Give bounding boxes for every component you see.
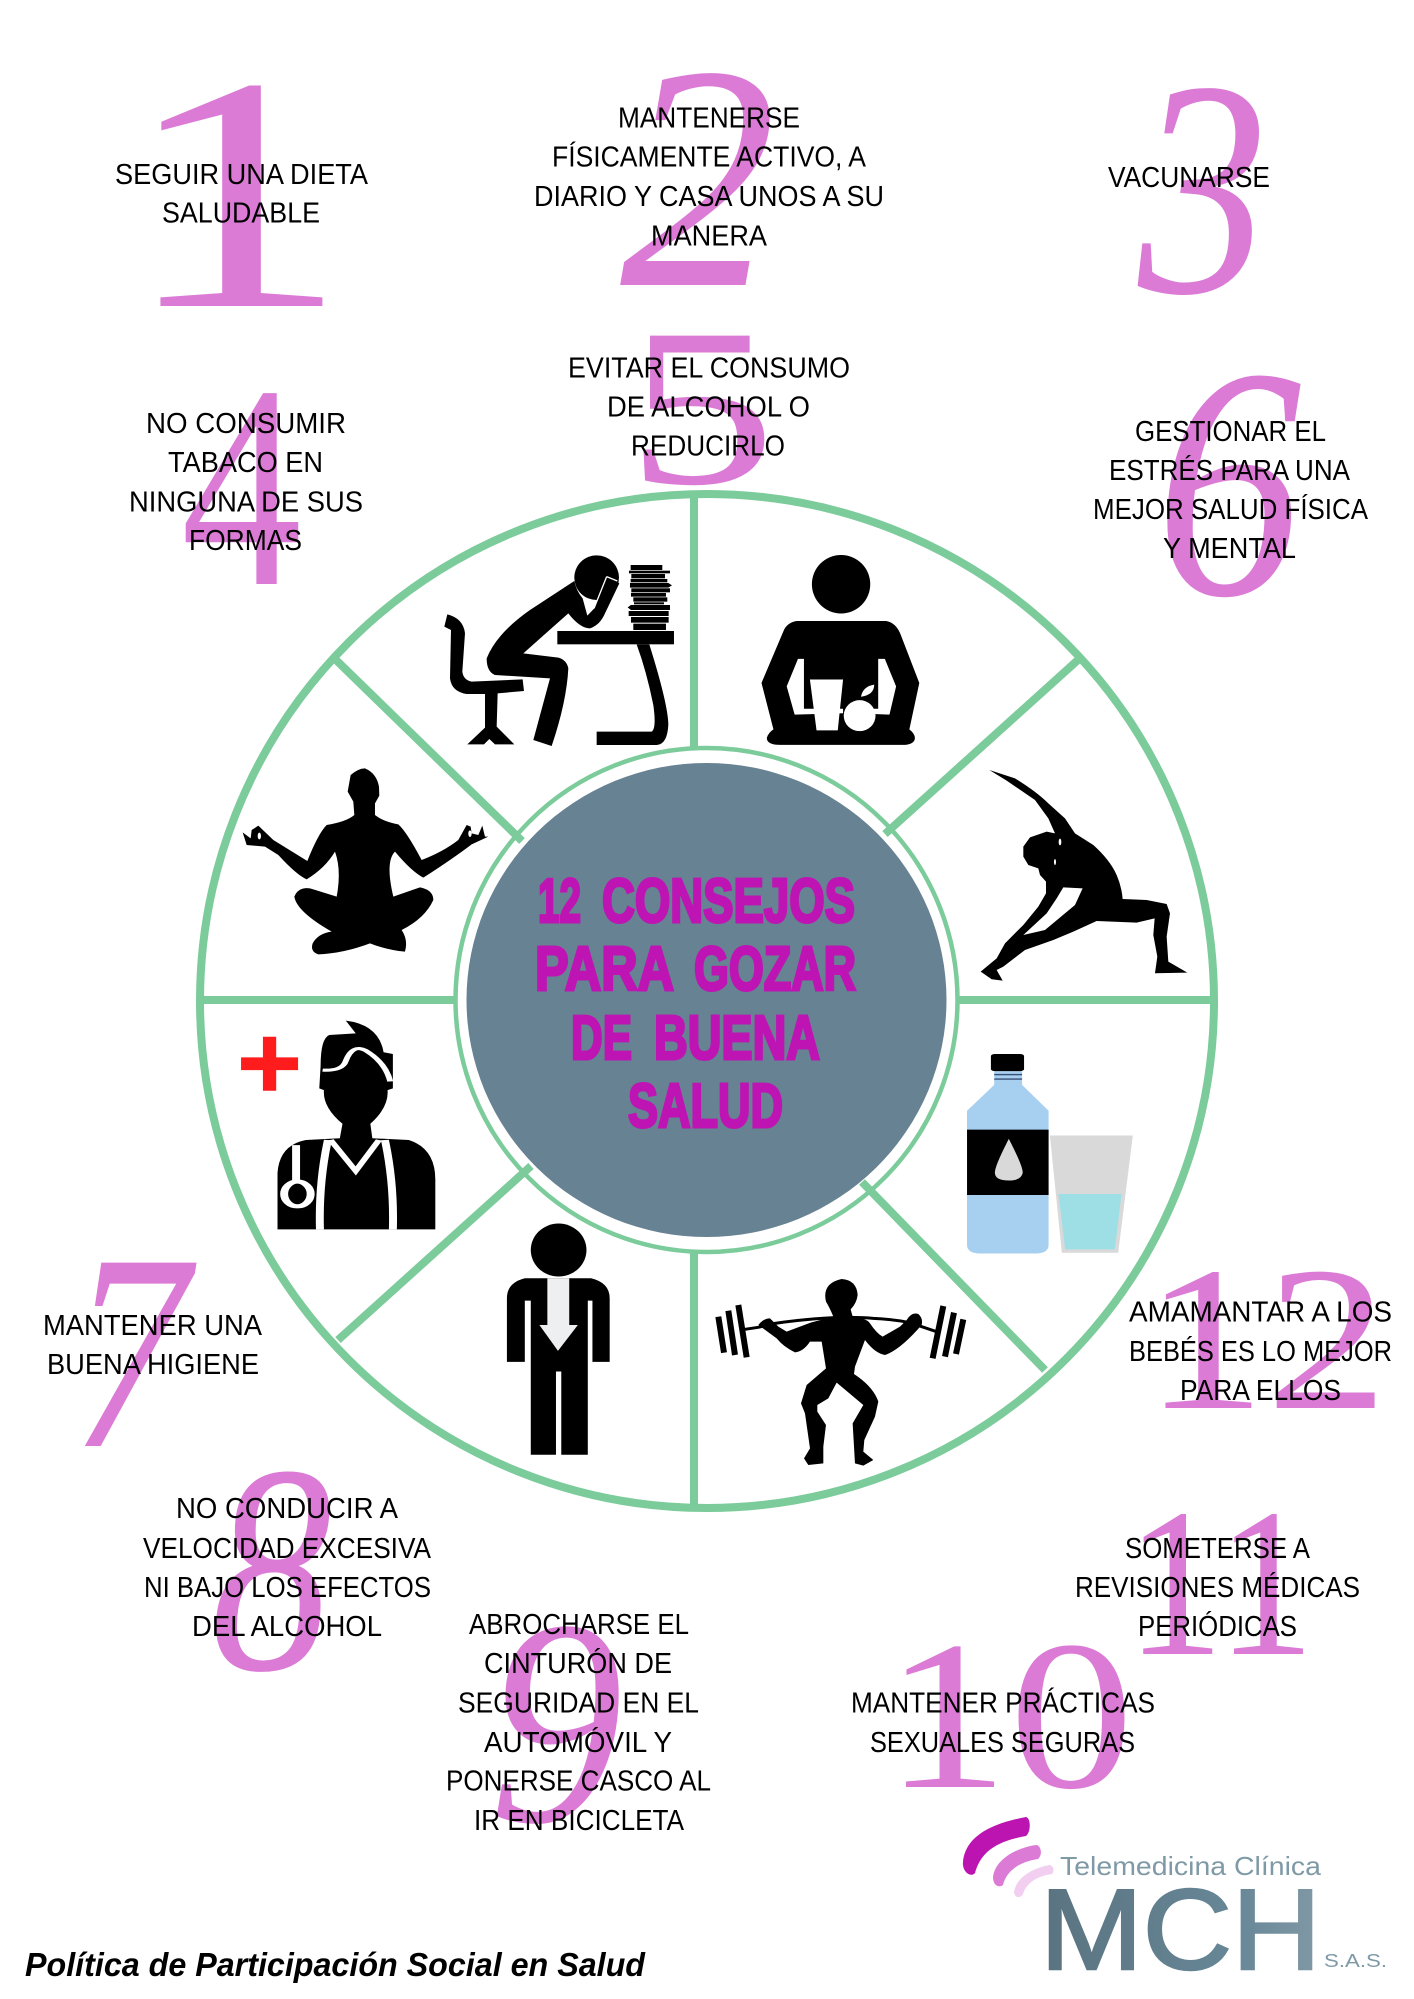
text: tip 6: GESTIONAR EL xyxy=(1135,416,1326,448)
text: tip 8: DEL ALCOHOL xyxy=(192,1611,382,1643)
title: DE xyxy=(571,1004,632,1073)
title xyxy=(535,867,856,1141)
center circle xyxy=(466,763,946,1237)
text: tip 10 xyxy=(851,1686,1155,1759)
text: tip 11: SOMETERSE A xyxy=(1125,1533,1311,1565)
numeral 7: 7 xyxy=(71,1197,200,1507)
text: tip 7: BUENA HIGIENE xyxy=(47,1349,259,1381)
icon: red cross xyxy=(241,1037,298,1091)
icon: stressed student at desk xyxy=(444,555,674,746)
text: tip 1: SEGUIR UNA DIETA xyxy=(115,159,369,191)
text: tip 2: MANERA xyxy=(651,221,768,253)
text: tip 5 xyxy=(568,353,850,462)
logo: Telemedicina Clínica MCH xyxy=(963,1817,1387,1994)
title: GOZAR xyxy=(694,935,856,1004)
text: tip 4 xyxy=(129,408,363,557)
title: BUENA xyxy=(654,1004,820,1073)
icon: meditation silhouette xyxy=(243,768,488,954)
text: tip 11 xyxy=(1075,1533,1360,1643)
text: tip 9: IR EN BICICLETA xyxy=(474,1805,685,1837)
text: tip 12: PARA ELLOS xyxy=(1180,1375,1341,1407)
text: tip 6 xyxy=(1093,416,1369,565)
logo text: MCH: MCH xyxy=(1040,1867,1321,1994)
logo text: S.A.S.: S.A.S. xyxy=(1324,1951,1387,1971)
text: tip 2 xyxy=(534,103,884,253)
text: tip 8 xyxy=(143,1493,432,1643)
numeral 6: 6 xyxy=(1156,301,1302,666)
text: tip 1 xyxy=(115,159,369,230)
title: PARA xyxy=(535,935,674,1004)
wheel spokes xyxy=(203,496,1211,1506)
text: tip 2: DIARIO Y CASA UNOS A SU xyxy=(534,181,884,213)
text: tip 8: VELOCIDAD EXCESIVA xyxy=(143,1533,432,1565)
text: tip 9 xyxy=(446,1609,711,1837)
logo text: Telemedicina Clínica: Telemedicina Clínica xyxy=(1060,1851,1322,1881)
text: tip 1: SALUDABLE xyxy=(162,198,320,230)
text: tip 10: SEXUALES SEGURAS xyxy=(870,1727,1135,1759)
text: tip 7 xyxy=(43,1310,263,1381)
text: tip 5: DE ALCOHOL O xyxy=(607,392,810,424)
title: CONSEJOS xyxy=(602,867,855,936)
numeral 5: 5 xyxy=(626,284,776,532)
title: 12 xyxy=(538,867,581,936)
text: tip 6: ESTRÉS PARA UNA xyxy=(1109,454,1351,487)
numeral 11: 11 xyxy=(1126,1466,1315,1701)
icon: weightlifter xyxy=(718,1279,963,1466)
text: tip 7: MANTENER UNA xyxy=(43,1310,263,1342)
text: tip 12 xyxy=(1129,1297,1392,1407)
icon: person with healthy food xyxy=(762,555,919,745)
numeral 12: 12 xyxy=(1144,1225,1388,1453)
text: tip 11: PERIÓDICAS xyxy=(1138,1610,1297,1643)
text: tip 9: ABROCHARSE EL xyxy=(469,1609,689,1641)
outer ring xyxy=(200,494,1214,1508)
icon: water bottle and glass xyxy=(967,1054,1133,1253)
footer: policy line: Política de Participación Social en Salud xyxy=(25,1946,646,1983)
logo arcs xyxy=(963,1817,1053,1897)
text: tip 5: EVITAR EL CONSUMO xyxy=(568,353,850,385)
inner thin ring xyxy=(456,748,958,1252)
text: tip 12: AMAMANTAR A LOS xyxy=(1129,1297,1392,1329)
text: tip 9: PONERSE CASCO AL xyxy=(446,1766,711,1798)
text: tip 4: NO CONSUMIR xyxy=(146,408,346,440)
numeral 2: 2 xyxy=(620,1,777,355)
icon: doctor with red cross xyxy=(241,1021,435,1229)
text: tip 4: TABACO EN xyxy=(168,447,323,479)
text: tip 2: MANTENERSE xyxy=(618,103,800,135)
text: tip 5: REDUCIRLO xyxy=(631,430,785,462)
numeral 10: 10 xyxy=(884,1598,1134,1834)
text: tip 6: MEJOR SALUD FÍSICA xyxy=(1093,493,1369,526)
text: tip 3: VACUNARSE xyxy=(1108,162,1270,194)
numeral 3: 3 xyxy=(1134,18,1268,359)
icon: yoga stretch silhouette xyxy=(981,770,1187,981)
text: tip 9: SEGURIDAD EN EL xyxy=(458,1688,699,1720)
numeral 8: 8 xyxy=(211,1405,332,1734)
text: tip 9: AUTOMÓVIL Y xyxy=(484,1726,672,1759)
numeral 9: 9 xyxy=(489,1559,623,1885)
text: tip 6: Y MENTAL xyxy=(1163,533,1296,565)
text: tip 11: REVISIONES MÉDICAS xyxy=(1075,1571,1360,1604)
title: SALUD xyxy=(628,1072,783,1141)
numeral 1: 1 xyxy=(120,9,350,378)
text: tip 4: NINGUNA DE SUS xyxy=(129,486,363,518)
text: tip 8: NO CONDUCIR A xyxy=(176,1493,399,1525)
text: tip 9: CINTURÓN DE xyxy=(484,1647,672,1680)
text: tip 2: FÍSICAMENTE ACTIVO, A xyxy=(552,141,867,174)
text: tip 8: NI BAJO LOS EFECTOS xyxy=(144,1572,431,1604)
icon: man with arrow xyxy=(507,1224,610,1455)
wheel diagram xyxy=(200,494,1214,1508)
text: tip 10: MANTENER PRÁCTICAS xyxy=(851,1686,1155,1720)
numeral 4: 4 xyxy=(181,326,302,647)
text: tip 4: FORMAS xyxy=(189,525,302,557)
